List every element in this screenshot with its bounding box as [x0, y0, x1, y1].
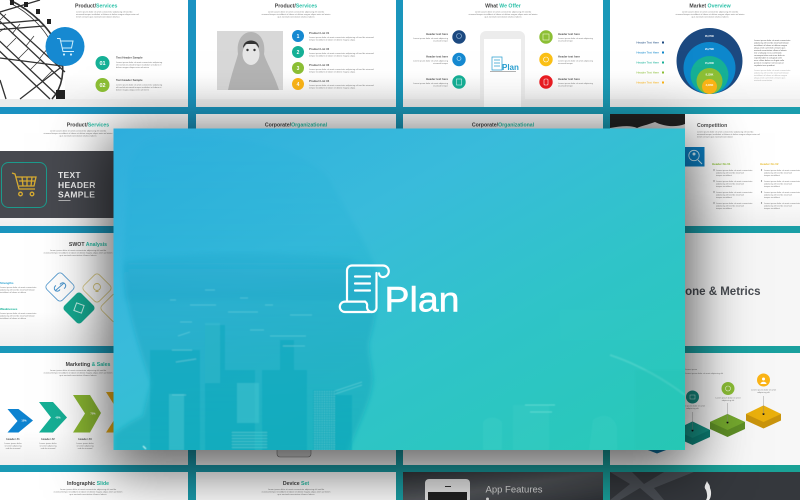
number 4: 4: [297, 82, 300, 88]
slide: Marketing & Sales: [0, 353, 188, 465]
right labels: Lorem ipsum dolor sit amet adipiscing: [558, 60, 594, 62]
strengths text: Lorem ipsum dolor sit amet consectetur: [0, 286, 37, 289]
intro text: quis nostrud exercitation ullamco laboris: [60, 254, 96, 257]
intro text: [697, 130, 760, 138]
chevron captions: Lorem ipsum dolor: [76, 442, 94, 445]
product list text: Product List #3: [309, 63, 330, 67]
bullet: [486, 498, 489, 500]
legend: Header Text Here: [636, 70, 659, 74]
intro text: [44, 130, 113, 138]
list text: elit sed do eiusmod tempor incididunt ut labore et: [116, 64, 162, 66]
body text: pariatur excepteur sint occaecat: [754, 62, 784, 64]
legend: Header Text Here: [636, 40, 659, 44]
intro text: [262, 488, 331, 496]
slide: Milestone & Metrics title: [610, 233, 800, 346]
chevron captions: sed do eiusmod: [41, 448, 56, 450]
badge 02: [96, 78, 110, 92]
chevron captions: sit amet adipiscing: [39, 444, 57, 448]
slide: What We Offer: [403, 0, 603, 107]
product list text: Product List #1: [309, 31, 330, 35]
body text: aliqua enim ad minim veniam quis: [754, 48, 785, 50]
nested circle chart: 35,374K: [705, 35, 714, 38]
intro text: quis nostrud exercitation ullamco laboris: [70, 493, 106, 496]
column: Header title 02: Lorem ipsum dolor sit amet consectetur: [764, 169, 800, 172]
column: Header title 02: tempor incididunt: [764, 196, 780, 199]
slide: Infographic Slide: [0, 472, 188, 500]
heading: Competition: [697, 123, 727, 129]
dark skyscrapers: [143, 290, 362, 455]
weaknesses text: Weaknesses: [0, 307, 18, 311]
body text: esse cillum dolore eu fugiat nulla: [754, 59, 785, 62]
icon: scroll: [340, 266, 389, 312]
left labels: Lorem ipsum dolor sit amet adipiscing: [413, 60, 449, 62]
intro text: Lorem ipsum dolor sit amet consectetur adipiscing elit sed do: [50, 369, 107, 372]
photo: women dark hair: [610, 114, 685, 144]
chevron: yellow: [106, 392, 135, 432]
column: Header title 01: tempor incididunt: [716, 196, 732, 199]
slide: Corporate/Organizational left: [196, 114, 396, 226]
product list text: tempor incididunt ut labore et dolore magna aliqua: [309, 70, 356, 74]
drop shadow of main panel: [114, 128, 685, 450]
icon: yellow cart: [12, 173, 36, 196]
body text: consequat duis aute irure dolor in: [754, 54, 786, 57]
step: blue: [640, 432, 674, 454]
photo: ferris wheel: [0, 0, 65, 99]
right labels: Header text here: [558, 77, 580, 81]
product list text: tempor incididunt ut labore et dolore magna aliqua: [309, 38, 356, 42]
body text: cupidatat non proident: [754, 64, 775, 67]
right labels: Lorem ipsum dolor sit amet adipiscing: [558, 37, 594, 40]
column: Header title 01: Lorem ipsum dolor sit amet consectetur: [716, 202, 753, 205]
icon: right red: [539, 75, 553, 89]
intro text: quis nostrud exercitation ullamco laboris: [60, 134, 96, 138]
legend: Header Text Here: [636, 60, 659, 64]
right labels: [558, 32, 594, 88]
step: green: [710, 414, 745, 437]
legend: Header Text Here: [636, 80, 659, 84]
weaknesses text: incididunt ut labore et dolore: [0, 317, 27, 320]
intro text: [262, 10, 331, 18]
intro text: quis nostrud exercitation ullamco laboris: [60, 374, 96, 377]
banner title: [58, 170, 96, 200]
chevron: blue: [8, 409, 33, 432]
icon: left teal: [452, 75, 466, 89]
body text: incididunt ut labore et dolore magna: [754, 44, 788, 47]
weaknesses text: adipiscing elit sed do eiusmod tempor: [0, 314, 35, 318]
number 1: [292, 30, 304, 42]
body text: adipiscing elit sed do eiusmod tempor: [754, 72, 789, 74]
chevron captions: Lorem ipsum dolor: [39, 442, 57, 445]
product list text: [309, 31, 375, 90]
slide: Product/Services with ferris wheel: [0, 0, 188, 107]
left labels: eiusmod tempor: [433, 84, 448, 88]
left labels: Header text here: [426, 54, 448, 58]
logo: Plan scroll and wordmark: [340, 266, 460, 320]
body text: nisi ut aliquip ex ea commodo: [754, 52, 782, 54]
chevron captions: Lorem ipsum dolor: [4, 442, 22, 445]
intro text: eiusmod tempor incididunt ut labore et dolore magna aliqua enim ad minim: [676, 13, 745, 16]
step captions: [680, 388, 776, 410]
number 2: 2: [297, 50, 300, 56]
column: Header title 01: tempor incididunt: [716, 185, 732, 188]
list text: [116, 56, 163, 92]
slide: Competition: [610, 114, 800, 226]
chevron captions: sed do eiusmod: [6, 448, 21, 450]
intro text: eiusmod tempor incididunt ut labore et dolore magna aliqua enim ad: [76, 13, 139, 16]
faint right-side towers: [524, 354, 685, 414]
left labels: Header text here: [426, 77, 448, 81]
icon: magnifier in blue square: [685, 147, 704, 166]
list text: Text Header Sample: [116, 56, 143, 60]
phone mockup with Plan logo: [480, 31, 525, 107]
left labels: eiusmod tempor: [433, 40, 448, 42]
slide: blank behind panel right: [403, 233, 603, 346]
strengths text: Strengths: [0, 281, 14, 285]
column: Header title 02: adipiscing elit sed do eiusmod: [764, 182, 793, 186]
column: Header title 02: adipiscing elit sed do eiusmod: [764, 194, 793, 196]
list text: dolore magna aliqua enim ad minim: [116, 66, 149, 69]
intro text: [44, 249, 113, 257]
column: Header title 02: adipiscing elit sed do eiusmod: [764, 204, 793, 208]
slide: SWOT Analysis: [0, 233, 188, 346]
column: Header title 02: tempor incididunt: [764, 174, 780, 177]
intro text: eiusmod tempor incididunt ut labore et dolore magna aliqua enim ad minim: [44, 252, 113, 254]
column: Header title 01: adipiscing elit sed do eiusmod: [716, 194, 745, 196]
slide: Product/Services text header banner: [0, 114, 188, 226]
icon: teal circle: [686, 390, 699, 404]
chevron captions: [4, 437, 94, 450]
intro text: quis nostrud exercitation ullamco laboris: [692, 16, 728, 18]
intro text: quis nostrud exercitation ullamco laboris: [278, 16, 314, 18]
column: Header title 01: tempor incididunt: [716, 174, 732, 177]
legend: [636, 40, 664, 84]
intro text: Lorem ipsum dolor sit amet consectetur adipiscing elit sed do: [268, 10, 325, 14]
strengths text: adipiscing elit sed do eiusmod tempor: [0, 288, 35, 292]
badge 02: 02: [99, 83, 106, 89]
chevron: teal: 40%: [55, 416, 61, 420]
left labels: [413, 32, 449, 88]
number 3: 3: [297, 66, 300, 72]
icon: left blue: [452, 53, 466, 66]
list text: dolore magna aliqua enim ad minim: [116, 88, 149, 92]
intro text: Lorem ipsum dolor sit amet consectetur adipiscing elit sed do: [76, 10, 133, 14]
right labels: Lorem ipsum dolor sit amet adipiscing: [558, 82, 594, 85]
icon: green circle: [722, 382, 734, 395]
weaknesses text: [0, 307, 37, 320]
intro text: [76, 10, 139, 18]
column: Header title 01: tempor incididunt: [716, 207, 732, 210]
intro text: Lorem ipsum dolor sit amet consectetur adipiscing elit sed do: [697, 130, 754, 134]
heading: Marketing & Sales: [66, 362, 110, 368]
intro text: Lorem ipsum dolor sit amet consectetur adipiscing elit sed do: [475, 10, 532, 14]
slide: App Features: [403, 472, 603, 500]
heading: Product/Services: [67, 122, 109, 128]
number 1: 1: [297, 34, 300, 40]
chevron: blue: 10%: [21, 418, 27, 422]
body text: aliqua enim ad minim veniam quis: [754, 78, 785, 80]
wordmark: Plan: [384, 280, 460, 320]
intro text: [469, 10, 538, 18]
column: Header title 02: Header No 02: [760, 162, 779, 166]
slide: blank behind panel: [196, 233, 396, 346]
body text: [754, 39, 791, 82]
banner title: SAMPLE: [58, 190, 95, 200]
banner title: HEADER: [58, 180, 96, 190]
banner title: TEXT: [58, 170, 81, 180]
body text: nostrud exercitation ullamco laboris: [754, 49, 787, 52]
step captions: Lorem ipsum dolor sit amet: [751, 388, 776, 392]
strengths text: [0, 281, 37, 294]
list text: Text Header Sample: [116, 78, 143, 82]
slide: Corporate/Organizational right: [403, 114, 603, 226]
right labels: eiusmod tempor: [558, 40, 573, 42]
intro text: minim veniam quis nostrud exercitation: [697, 136, 734, 138]
column: Header title 01: Lorem ipsum dolor sit amet consectetur: [716, 191, 753, 194]
product list text: Product List #2: [309, 47, 330, 51]
heading: What We Offer: [485, 4, 521, 10]
icon: yellow circle: [757, 374, 770, 386]
left labels: eiusmod tempor: [433, 62, 448, 65]
slide: Corporate/Organizational left: Corporate/Organizational: [265, 122, 328, 128]
step captions: adipiscing elit: [757, 391, 770, 394]
list text: Lorem ipsum dolor sit amet consectetur adipiscing: [116, 61, 163, 64]
slide: blank behind panel: [403, 353, 603, 465]
heading: Market Overview: [689, 4, 732, 10]
column: Header title 02: [760, 162, 800, 210]
intro text: Lorem ipsum dolor sit amet consectetur adipiscing elit sed do: [60, 488, 117, 491]
chevron captions: sit amet adipiscing: [76, 444, 94, 448]
heading: SWOT Analysis: [69, 242, 107, 248]
slide: Corporate/Organizational right: Corporate/Organizational: [472, 122, 535, 128]
icon: right green: [539, 30, 553, 44]
slide: Device Set: [196, 472, 396, 500]
slide: Milestone & Metrics title: Milestone & Metrics: [652, 286, 760, 298]
list text: elit sed do eiusmod tempor incididunt ut labore et: [116, 86, 162, 89]
title: App Features: [486, 484, 543, 496]
right labels: Header text here: [558, 54, 580, 58]
column: Header title 01: adipiscing elit sed do eiusmod: [716, 172, 745, 174]
right labels: Header text here: [558, 32, 580, 36]
column: Header title 02: Lorem ipsum dolor sit amet consectetur: [764, 191, 800, 194]
list text: Lorem ipsum dolor sit amet consectetur adipiscing: [116, 84, 163, 86]
column: Header title 02: tempor incididunt: [764, 207, 780, 210]
diamond: puzzle icon: [62, 291, 96, 325]
step: yellow: [746, 406, 781, 428]
badge 01: [96, 56, 110, 70]
column: Header title 01: Lorem ipsum dolor sit amet consectetur: [716, 169, 753, 172]
nested circle chart: 8,130K: [706, 74, 714, 76]
slide: stair steps: [610, 353, 800, 465]
phone: [425, 479, 470, 500]
chevron captions: Header #1: [6, 437, 20, 441]
intro text: quis nostrud exercitation ullamco laboris: [278, 493, 314, 496]
column: Header title 01: adipiscing elit sed do eiusmod: [716, 182, 745, 186]
badge 01: 01: [99, 61, 106, 67]
nested circle chart: 26,279K: [705, 48, 714, 51]
body text: incididunt ut labore et dolore magna: [754, 74, 788, 77]
intro text: Lorem ipsum dolor sit amet consectetur adipiscing elit sed do: [268, 488, 325, 491]
chevron captions: Header #3: [78, 437, 92, 441]
intro text: eiusmod tempor incididunt ut labore et dolore magna aliqua enim ad minim: [469, 13, 538, 16]
number 2: [292, 46, 304, 58]
intro text: Lorem ipsum dolor sit amet consectetur adipiscing elit sed do: [50, 249, 107, 252]
intro text: Lorem ipsum dolor sit amet consectetur adipiscing elit sed do: [682, 10, 739, 14]
chevron captions: sit amet adipiscing: [4, 444, 22, 448]
heading: Device Set: [283, 481, 309, 487]
main cover panel: [114, 128, 685, 450]
intro text: eiusmod tempor incididunt ut labore et dolore magna aliqua enim ad minim: [44, 132, 113, 135]
body text: nostrud exercitation: [754, 79, 773, 82]
intro text: quis nostrud exercitation ullamco laboris: [485, 16, 521, 18]
slide: device behind panel: [196, 353, 396, 465]
left labels: Lorem ipsum dolor sit amet adipiscing: [413, 82, 449, 85]
product list text: Product List #4: [309, 79, 330, 83]
column: Header title 01: [712, 162, 753, 210]
slide: dark closing with star logo: [610, 472, 800, 500]
chevron: teal: [39, 402, 67, 432]
silhouette with city: [114, 250, 685, 450]
column: Header title 02: adipiscing elit sed do eiusmod: [764, 172, 793, 174]
icon: right yellow: [539, 53, 553, 66]
icon: left navy: [452, 30, 466, 44]
right labels: eiusmod tempor: [558, 62, 573, 65]
connector lines: [692, 396, 764, 430]
product list text: Lorem ipsum dolor sit amet consectetur adipiscing elit sed do eiusmod: [309, 36, 375, 39]
step captions: adipiscing elit: [686, 407, 699, 410]
intro text: eiusmod tempor incididunt ut labore et dolore magna aliqua enim ad minim: [54, 490, 123, 494]
intro text: eiusmod tempor incididunt ut labore et dolore magna aliqua enim ad minim: [44, 372, 113, 374]
city horizon band: [124, 254, 376, 300]
nested circle chart: [676, 28, 742, 94]
caption text: Lorem ipsum: [685, 368, 697, 371]
product list text: Lorem ipsum dolor sit amet consectetur adipiscing elit sed do eiusmod: [309, 68, 375, 71]
intro text: eiusmod tempor incididunt ut labore et dolore magna aliqua enim ad: [697, 133, 760, 136]
phone mockup with Plan logo: Plan: [502, 63, 519, 72]
step: teal: [675, 422, 710, 445]
caption text: [685, 368, 724, 375]
step captions: Lorem ipsum dolor sit amet: [680, 404, 705, 408]
column: Header title 02: tempor incididunt: [764, 185, 780, 188]
number 3: [292, 62, 304, 74]
heading: Product/Services: [275, 4, 317, 10]
right labels: eiusmod tempor: [558, 84, 573, 88]
chevron: green: 70%: [90, 412, 96, 416]
column: Header title 01: adipiscing elit sed do eiusmod: [716, 204, 745, 208]
step captions: Lorem ipsum dolor sit amet: [715, 396, 741, 400]
diamond: link icon: [44, 271, 76, 303]
nested circle chart: 15,224K: [705, 62, 714, 65]
legend: Header Text Here: [636, 50, 659, 54]
left labels: Lorem ipsum dolor sit amet adipiscing: [413, 37, 449, 40]
diamond: bulb icon: [81, 272, 113, 304]
product list text: tempor incididunt ut labore et dolore magna aliqua: [309, 86, 356, 90]
product list text: Lorem ipsum dolor sit amet consectetur adipiscing elit sed do eiusmod: [309, 52, 375, 55]
intro text: [44, 369, 113, 377]
body text: Lorem ipsum dolor sit amet consectetur: [754, 39, 791, 42]
number 4: [292, 78, 304, 90]
chevron captions: sed do eiusmod: [78, 448, 93, 450]
dark banner: [0, 151, 188, 218]
intro text: eiusmod tempor incididunt ut labore et dolore magna aliqua enim ad minim: [262, 490, 331, 494]
intro text: Lorem ipsum dolor sit amet consectetur adipiscing elit sed do: [50, 130, 107, 132]
product list text: tempor incididunt ut labore et dolore magna aliqua: [309, 54, 356, 58]
intro text: [54, 488, 123, 496]
chevron: green: [73, 395, 101, 432]
step captions: adipiscing elit: [722, 399, 735, 402]
column: Header title 01: Header No 01: [712, 162, 731, 166]
caption text: Lorem ipsum dolor sit amet adipiscing elit: [685, 372, 724, 375]
body text: reprehenderit in voluptate velit: [754, 56, 782, 60]
heading: Infographic Slide: [67, 481, 109, 487]
intro text: eiusmod tempor incididunt ut labore et dolore magna aliqua enim ad minim: [262, 13, 331, 16]
weaknesses text: Lorem ipsum dolor sit amet consectetur: [0, 312, 37, 315]
body text: Lorem ipsum dolor sit amet consectetur: [754, 69, 791, 72]
left labels: Header text here: [426, 32, 448, 36]
slide: Market Overview: [610, 0, 800, 107]
column: Header title 01: Lorem ipsum dolor sit amet consectetur: [716, 180, 753, 183]
intro text: [676, 10, 745, 18]
heading: Product/Services: [75, 4, 118, 10]
intro text: minim veniam quis nostrud exercitation ullamco: [76, 16, 121, 18]
body text: adipiscing elit sed do eiusmod tempor: [754, 42, 789, 44]
icon: shopping cart in blue circle: [46, 27, 84, 66]
column: Header title 02: Lorem ipsum dolor sit amet consectetur: [764, 180, 800, 183]
column: Header title 02: Lorem ipsum dolor sit amet consectetur: [764, 202, 800, 205]
nested circle chart: 3,245K: [706, 84, 714, 87]
diamond: yellow partly hidden: [99, 292, 131, 324]
product list text: Lorem ipsum dolor sit amet consectetur adipiscing elit sed do eiusmod: [309, 84, 375, 87]
chevron captions: Header #2: [41, 437, 55, 441]
slide: Product/Services numbered list: [196, 0, 396, 107]
photo: woman in hood: [217, 31, 283, 90]
strengths text: incididunt ut labore et dolore: [0, 291, 27, 294]
